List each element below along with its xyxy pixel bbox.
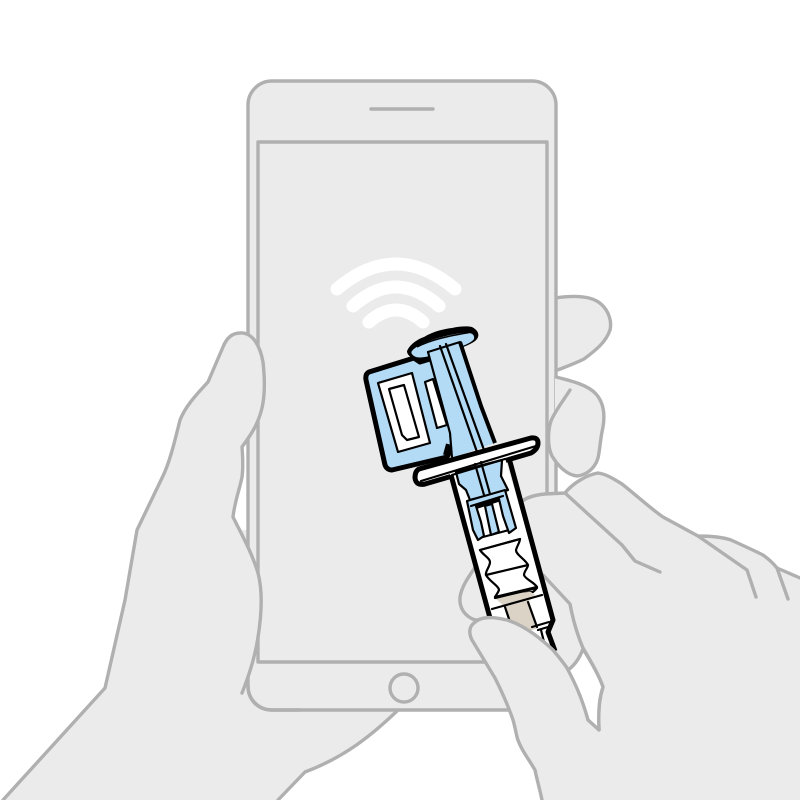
tag white label — [378, 373, 430, 452]
phone screen — [258, 142, 547, 662]
barrel walls — [451, 458, 555, 651]
tan medicine column — [495, 592, 538, 636]
left hand palm behind phone — [3, 530, 397, 800]
tag window — [425, 379, 447, 428]
bellows — [480, 539, 537, 597]
finger flange — [415, 438, 538, 484]
upper right fingertip behind phone — [555, 296, 611, 371]
wifi icon — [337, 264, 455, 322]
background gap between fingers — [566, 649, 603, 730]
phone body — [248, 81, 556, 710]
thumb outline — [470, 618, 599, 800]
collar inner blue columns — [476, 500, 509, 537]
tag chip — [389, 385, 419, 440]
plunger top flange — [407, 326, 478, 360]
phone speaker — [371, 107, 433, 111]
rod lines inside barrel — [452, 459, 505, 495]
plunger rod — [428, 342, 495, 458]
connector collar — [467, 490, 516, 540]
phone home button — [390, 674, 418, 702]
syringe tip lines — [492, 588, 549, 650]
right hand back and fingers — [515, 473, 800, 800]
left hand thumb and fingers over phone — [3, 333, 300, 800]
tag lower notch — [445, 444, 448, 455]
second right finger wrapping phone edge — [548, 377, 604, 476]
phone bottom corner over palm — [248, 686, 300, 710]
blue plunger inside barrel — [456, 460, 508, 500]
syringe — [366, 326, 555, 652]
barrel interior — [450, 458, 555, 652]
bellows folds — [480, 539, 537, 597]
right thumb in front of syringe — [470, 618, 800, 800]
NFC tag — [366, 356, 455, 470]
collar frame — [467, 490, 516, 540]
right index finger behind syringe — [460, 563, 500, 620]
